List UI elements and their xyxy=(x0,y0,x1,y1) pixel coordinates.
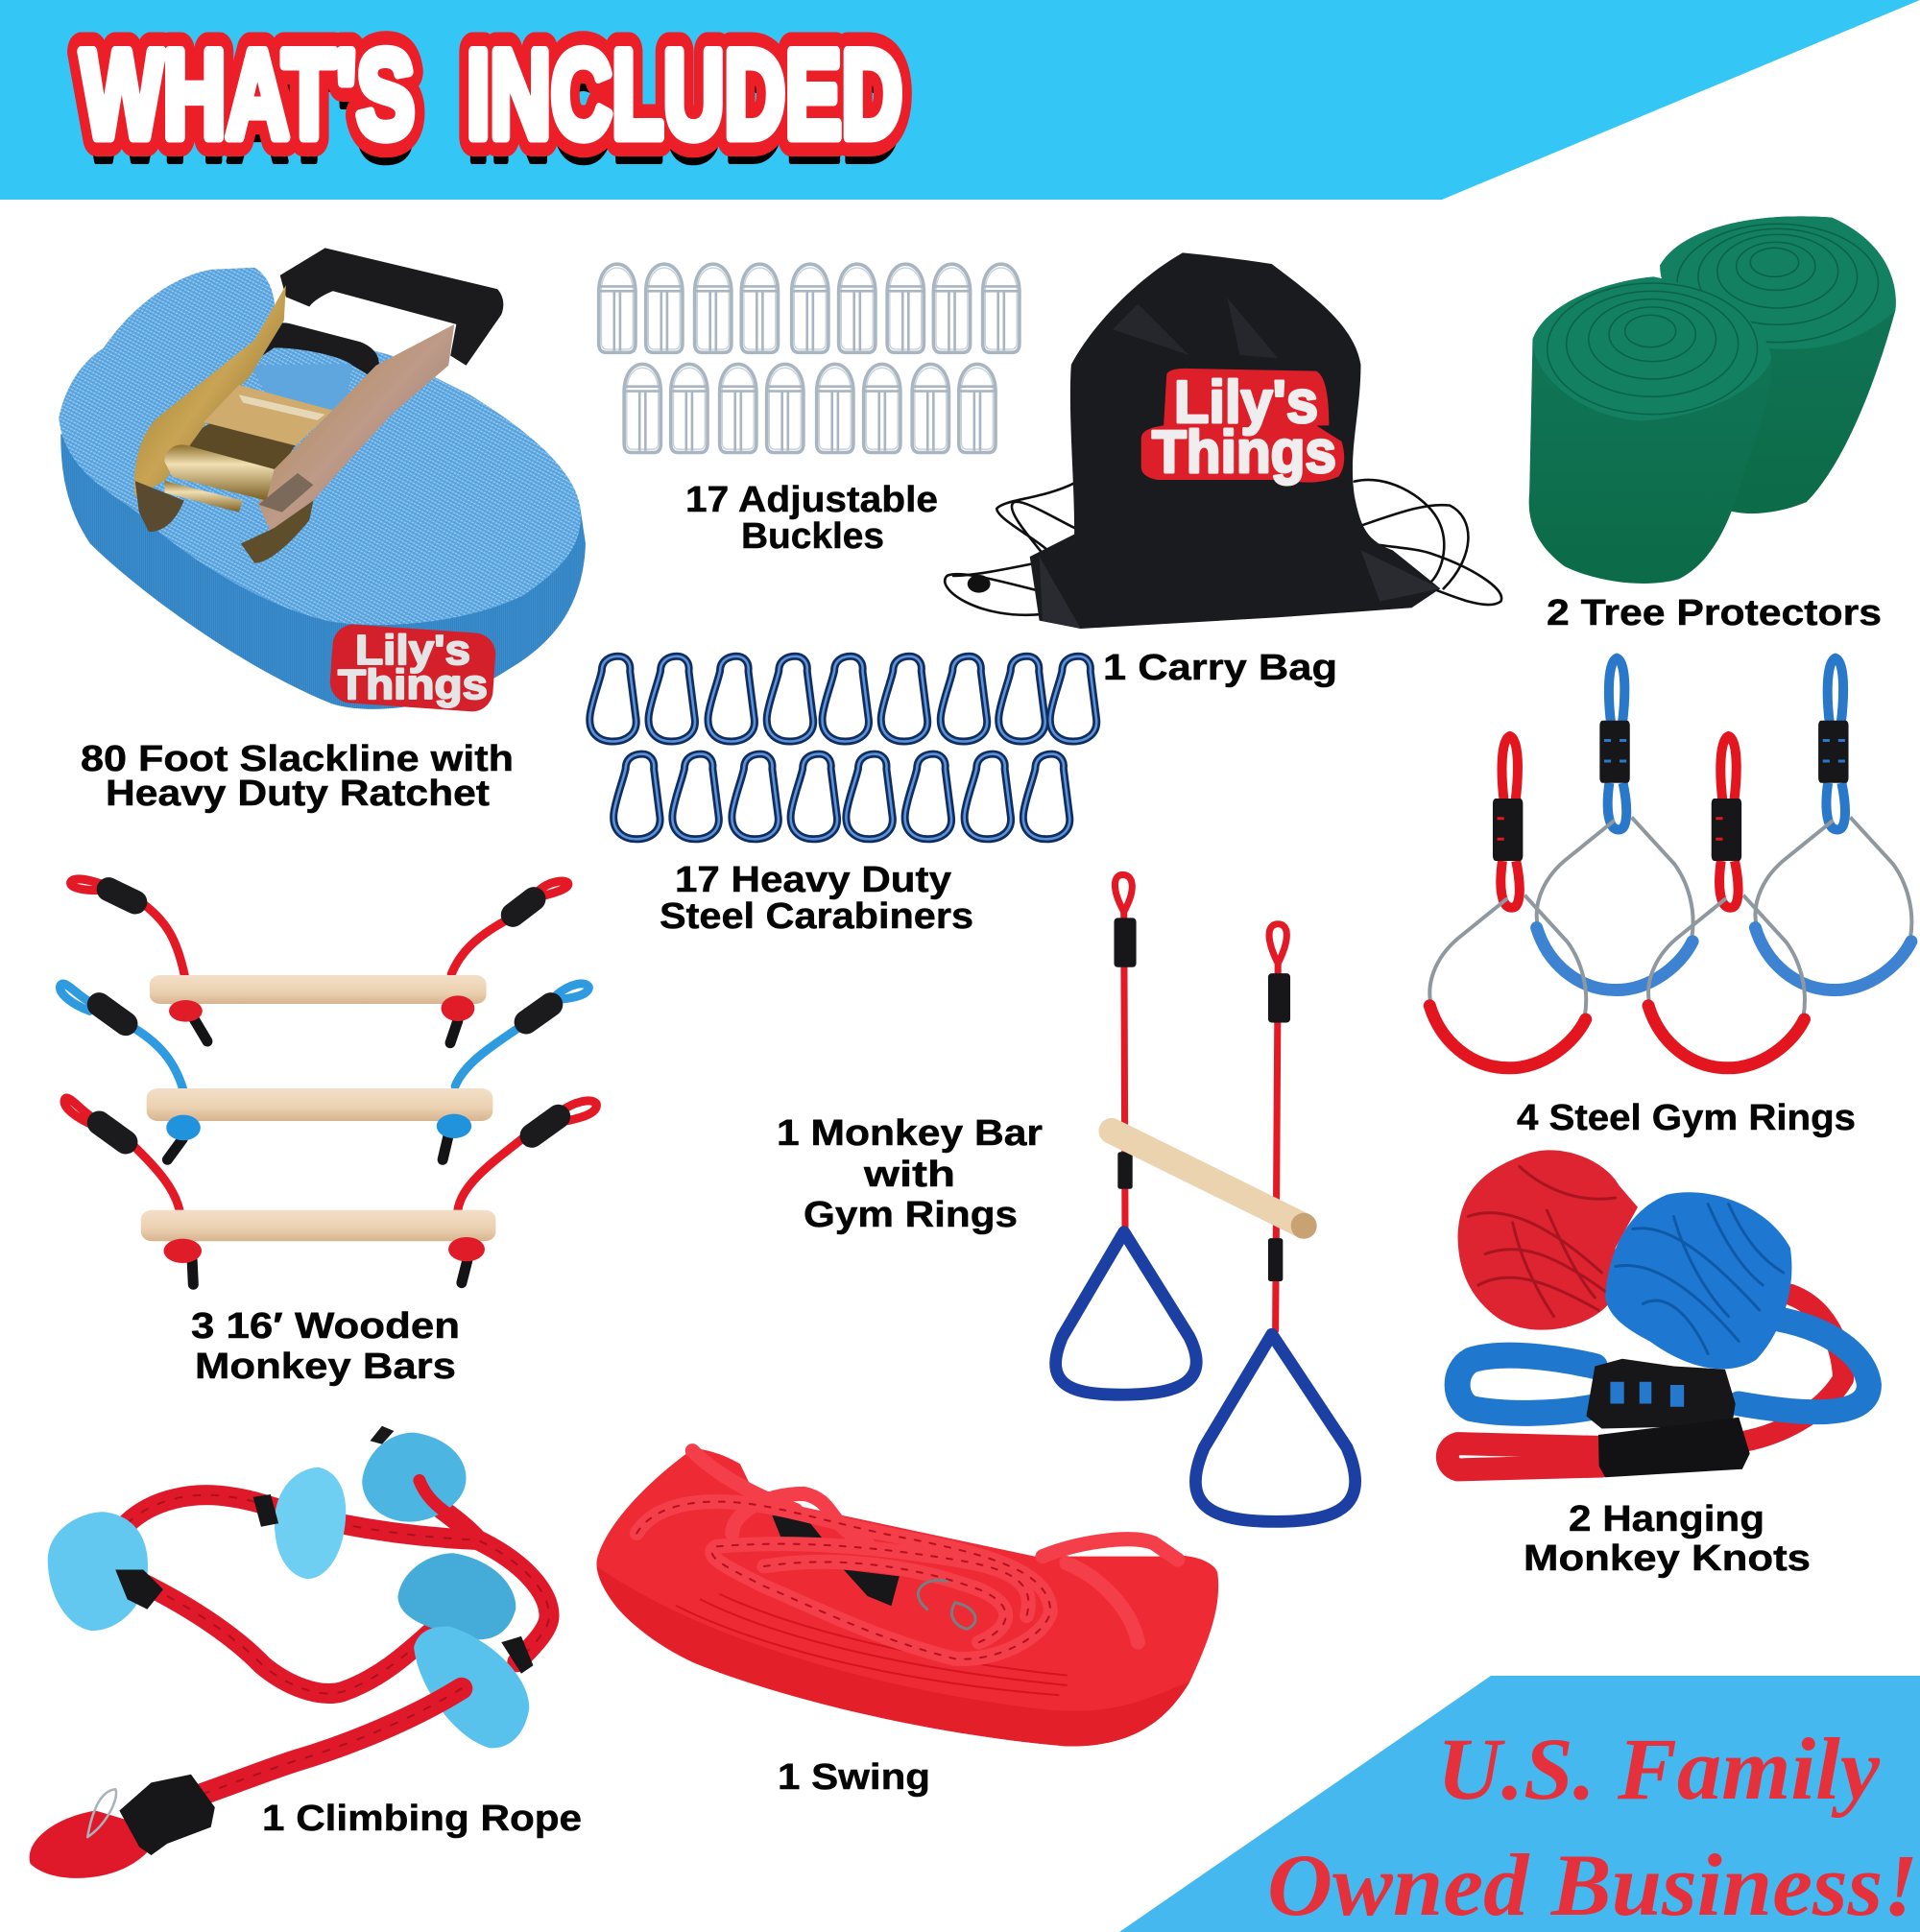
item: climbing rope xyxy=(30,1426,549,1878)
label: swing: 1 Swing xyxy=(778,1757,930,1798)
item: tree protectors xyxy=(1529,216,1896,584)
label: monkey bar with gym rings: with xyxy=(863,1155,955,1195)
label: monkey bar with gym rings: 1 Monkey Bar xyxy=(777,1113,1043,1154)
item: carabiners xyxy=(589,656,1096,839)
title xyxy=(81,24,902,188)
label: slackline: 80 Foot Slackline with xyxy=(81,739,514,779)
bag logo xyxy=(1152,370,1336,486)
title: WHAT'S xyxy=(81,24,415,164)
item: swing xyxy=(596,1449,1218,1747)
label: monkey bar with gym rings xyxy=(777,1113,1043,1235)
label: slackline xyxy=(81,739,514,814)
corner panel xyxy=(1119,1676,1920,1932)
label: carabiners xyxy=(660,860,973,937)
item: monkey bar with gym rings xyxy=(1056,874,1356,1521)
title: INCLUDED xyxy=(467,48,902,188)
label: carry bag: 1 Carry Bag xyxy=(1103,648,1337,688)
label: monkey knots: Monkey Knots xyxy=(1524,1538,1811,1579)
title: WHAT'S xyxy=(81,24,415,164)
logo on slackline xyxy=(328,623,497,713)
label: buckles: 17 Adjustable xyxy=(685,480,938,520)
logo on slackline: Things xyxy=(338,661,488,708)
label: monkey bars: 3 16′ Wooden xyxy=(191,1306,460,1347)
label: monkey bars xyxy=(191,1306,460,1387)
item: hanging monkey knots xyxy=(1448,1150,1869,1477)
label: tree protectors: 2 Tree Protectors xyxy=(1547,593,1882,633)
slogan: Owned Business! xyxy=(1267,1836,1918,1932)
label: buckles xyxy=(685,480,938,557)
label: slackline: Heavy Duty Ratchet xyxy=(106,774,490,814)
title: INCLUDED xyxy=(467,24,902,164)
label: carabiners: Steel Carabiners xyxy=(660,896,973,937)
label: monkey bar with gym rings: Gym Rings xyxy=(804,1195,1018,1235)
item: carry bag xyxy=(945,252,1501,629)
item: adjustable buckles xyxy=(599,264,1020,453)
title: WHAT'S xyxy=(81,48,415,188)
item: wooden monkey bars xyxy=(60,879,596,1284)
header banner xyxy=(0,0,1920,200)
slogan: U.S. Family xyxy=(1437,1720,1881,1818)
item: slackline with ratchet xyxy=(59,248,586,709)
slogan xyxy=(1267,1720,1918,1932)
bag logo: Things xyxy=(1152,419,1336,486)
title: INCLUDED xyxy=(467,24,902,164)
label: buckles: Buckles xyxy=(741,516,884,557)
bag logo: Lily's xyxy=(1174,370,1318,436)
label: carabiners: 17 Heavy Duty xyxy=(675,860,951,900)
label: gym rings: 4 Steel Gym Rings xyxy=(1517,1098,1856,1138)
label: monkey knots: 2 Hanging xyxy=(1569,1499,1764,1539)
label: monkey knots xyxy=(1524,1499,1811,1579)
label: climbing rope: 1 Climbing Rope xyxy=(262,1799,582,1839)
item: steel gym rings xyxy=(1429,658,1911,1068)
logo on slackline: Lily's xyxy=(355,627,470,674)
label: monkey bars: Monkey Bars xyxy=(195,1347,456,1387)
